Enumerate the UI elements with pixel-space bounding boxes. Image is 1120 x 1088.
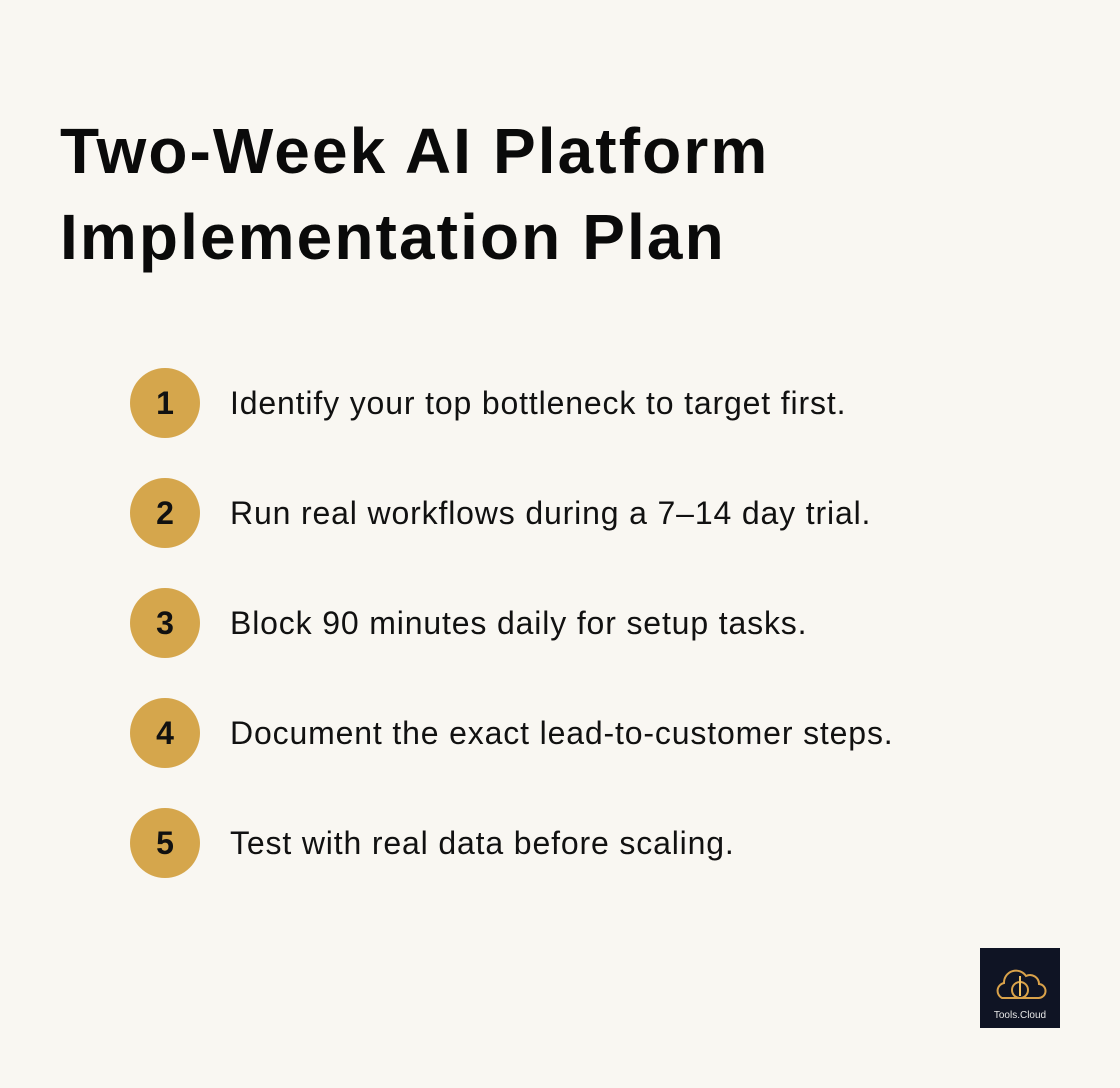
step 3: 3 [156,605,174,641]
step 1 [130,368,846,438]
title [60,115,769,273]
title: Two-Week AI Platform [60,115,769,187]
step 4: Document the exact lead-to-customer steps. [230,715,894,751]
logo: Tools.Cloud [994,1010,1046,1021]
step 3: Block 90 minutes daily for setup tasks. [230,605,807,641]
step 5: Test with real data before scaling. [230,825,735,861]
step 5 [130,808,735,878]
step 1: Identify your top bottleneck to target first. [230,385,846,421]
title: Implementation Plan [60,201,726,273]
logo [980,948,1060,1028]
step 4 [130,698,894,768]
step 2 [130,478,871,548]
step 2: 2 [156,495,174,531]
step 2: Run real workflows during a 7–14 day trial. [230,495,871,531]
step 1: 1 [156,385,174,421]
step 3 [130,588,807,658]
step 5: 5 [156,825,174,861]
step 4: 4 [156,715,174,751]
